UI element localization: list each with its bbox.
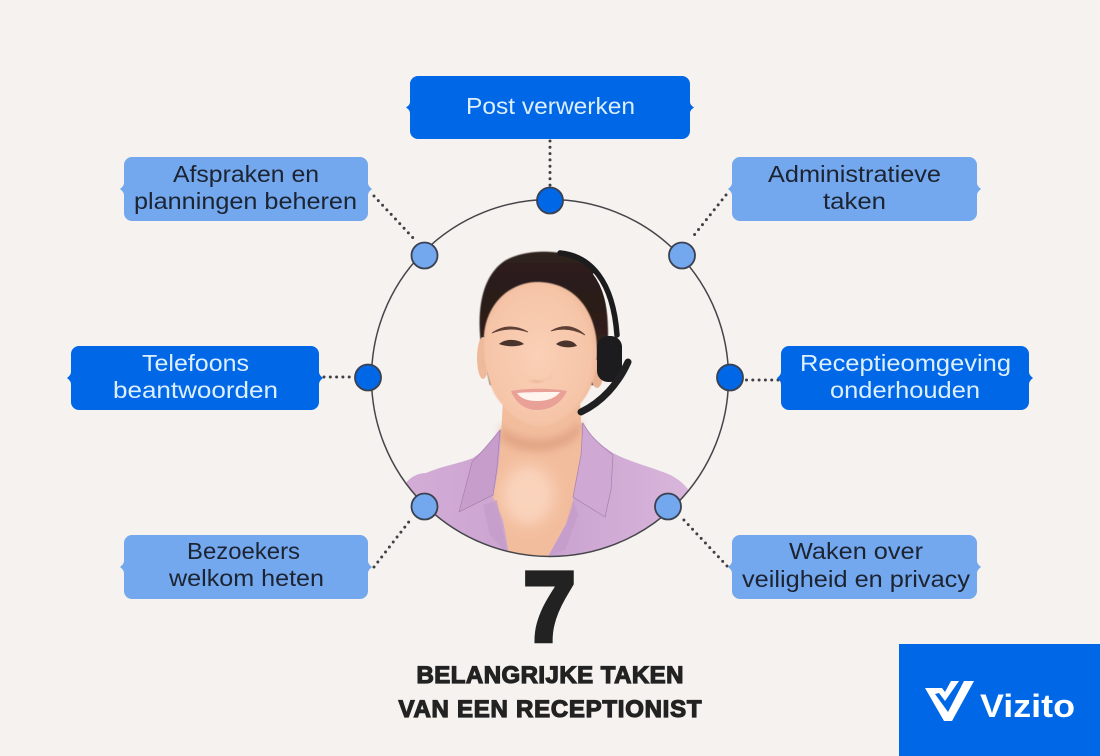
task: Administratieve taken	[728, 157, 981, 221]
task: Receptieomgeving onderhouden	[777, 346, 1033, 410]
title: BELANGRIJKE TAKEN	[416, 662, 684, 689]
mic arm	[581, 362, 628, 412]
title: VAN EEN RECEPTIONIST	[398, 696, 702, 723]
connector dots	[324, 141, 778, 567]
ear cup	[597, 336, 622, 382]
main ring	[372, 200, 728, 556]
blouse placket	[484, 500, 574, 530]
portrait of receptionist with headset	[400, 252, 700, 570]
hair	[480, 252, 608, 385]
headset band highlight	[592, 273, 609, 323]
task: Waken over veiligheid en privacy: Waken over	[789, 538, 923, 564]
task: Bezoekers welkom heten: welkom heten	[168, 565, 324, 591]
task: Bezoekers welkom heten: Bezoekers	[187, 538, 300, 564]
task: Waken over veiligheid en privacy	[728, 535, 981, 599]
task: Bezoekers welkom heten	[120, 535, 372, 599]
ring nodes	[355, 188, 743, 520]
nose shadow	[530, 380, 542, 383]
right eyebrow	[551, 326, 585, 335]
teeth	[517, 392, 560, 401]
neck and chest	[493, 400, 582, 560]
task: Administratieve taken: Administratieve	[768, 161, 941, 187]
task: Receptieomgeving onderhouden: Receptieomgeving	[800, 350, 1011, 376]
right eye	[556, 340, 577, 347]
blouse	[406, 423, 688, 556]
mouth	[511, 389, 567, 410]
chest highlight	[502, 465, 554, 525]
left ear	[477, 337, 488, 379]
logo block	[899, 644, 1100, 756]
task: Post verwerken	[406, 76, 694, 139]
right collar	[573, 423, 613, 517]
task: Waken over veiligheid en privacy: veiligheid en privacy	[742, 566, 971, 592]
task: Administratieve taken: taken	[823, 188, 886, 214]
left eye	[499, 340, 524, 346]
task: Afspraken en planningen beheren	[120, 157, 372, 221]
task: Afspraken en planningen beheren: Afspraken en	[173, 161, 319, 187]
icon: Vizito check mark	[925, 681, 974, 721]
right ear	[592, 360, 602, 388]
logo wordmark: Vizito	[980, 688, 1075, 724]
left eyebrow	[492, 327, 528, 333]
task: Telefoons beantwoorden: beantwoorden	[113, 377, 278, 403]
face	[484, 282, 597, 427]
left collar	[459, 430, 500, 512]
title	[398, 662, 702, 723]
task: Post verwerken: Post verwerken	[466, 93, 635, 119]
neck shadow	[501, 420, 581, 451]
task: Telefoons beantwoorden	[67, 346, 323, 410]
headset band	[560, 253, 617, 335]
task: Receptieomgeving onderhouden: onderhouden	[830, 377, 980, 403]
task: Telefoons beantwoorden: Telefoons	[142, 350, 249, 376]
task: Afspraken en planningen beheren: planningen beheren	[134, 188, 357, 214]
big number 7: 7	[524, 552, 576, 662]
